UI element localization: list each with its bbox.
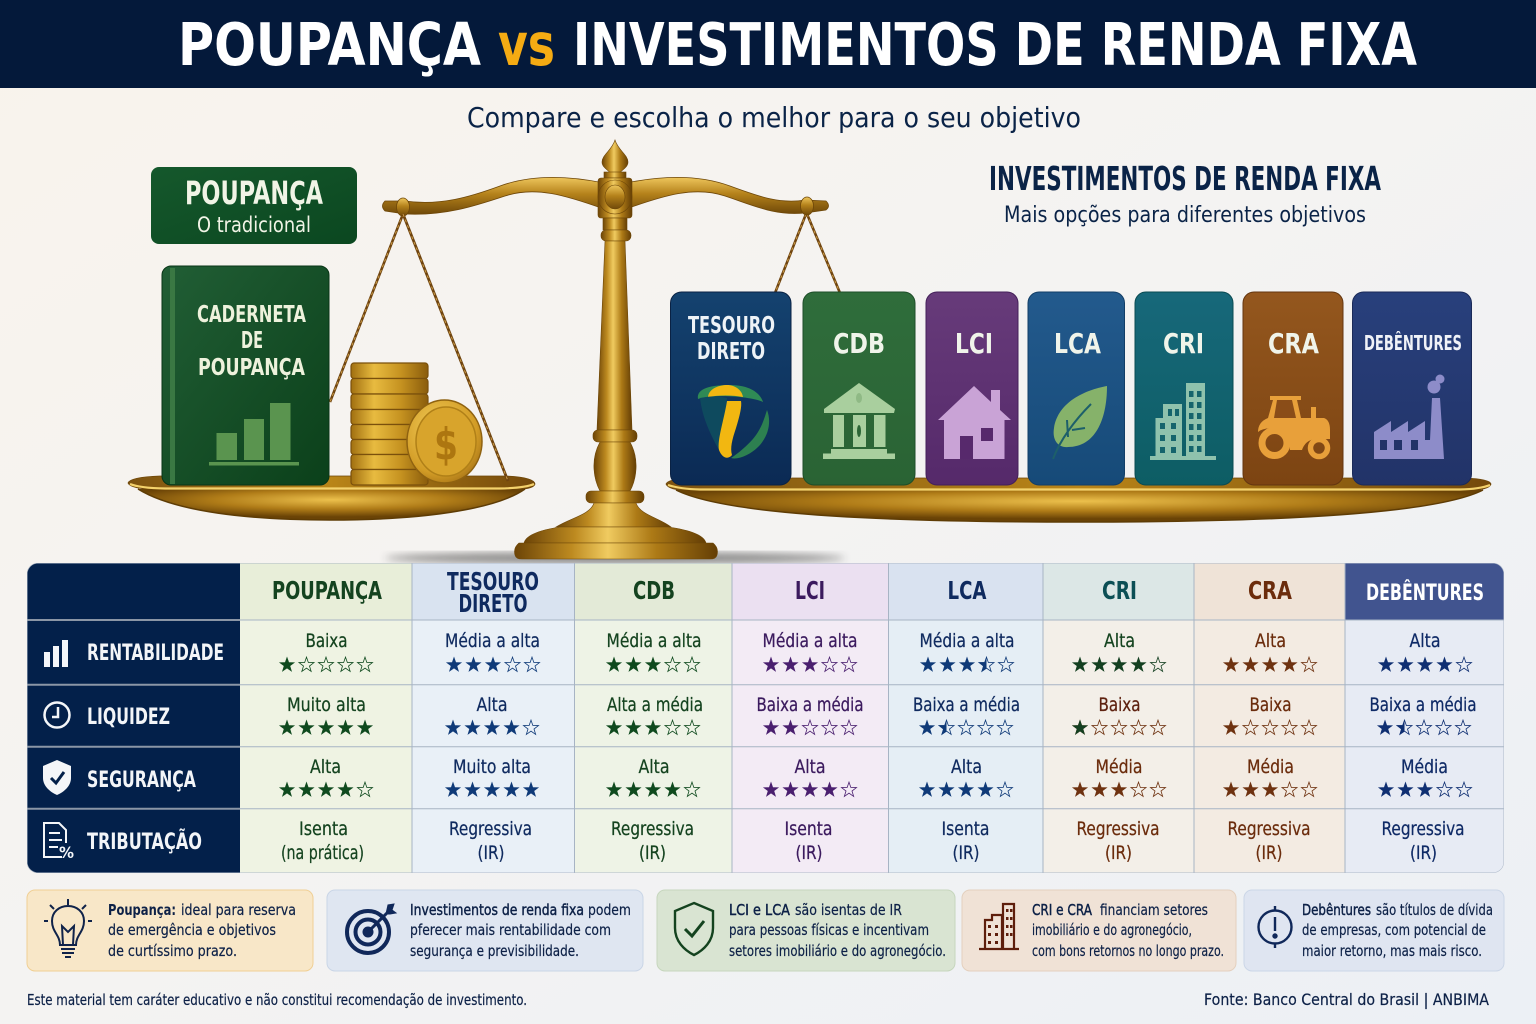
title banner [0, 0, 1536, 88]
table column: tesouro direto: TESOURO [447, 567, 539, 596]
icon: tractor [1258, 396, 1330, 456]
callout: investimentos de renda fixa: podem [588, 901, 631, 919]
icon: growth bars [209, 403, 299, 466]
card: tesouro direto: DIRETO [697, 339, 765, 365]
callout: CRI e CRA [962, 890, 1236, 971]
callout: LCI e LCA: são isentas de IR [795, 901, 902, 919]
book: caderneta de poupança: POUPANÇA [198, 355, 305, 381]
callout: poupança [27, 890, 313, 971]
shadow under scale [385, 552, 845, 564]
icon: dollar coin [407, 400, 482, 483]
table column: LCI: (IR) [796, 842, 822, 864]
table column: CRI: CRI [1102, 576, 1137, 605]
table column: LCA: Média a alta [920, 630, 1014, 652]
book: caderneta de poupança: DE [241, 328, 263, 354]
card: LCI: LCI [955, 327, 993, 360]
table column: LCI: Baixa a média [756, 694, 864, 716]
row label: rentabilidade [44, 640, 224, 667]
callout: investimentos de renda fixa: pferecer mais rentabilidade com [410, 921, 611, 939]
row label: liquidez: LIQUIDEZ [87, 705, 170, 730]
callout: LCI e LCA [657, 890, 955, 971]
card: CRI: CRI [1163, 327, 1204, 360]
card: CRA [1243, 292, 1343, 485]
callout: debêntures [1244, 890, 1504, 971]
card: CDB [803, 292, 915, 485]
table column: LCI: Alta [794, 756, 826, 778]
table column: CRI [1043, 563, 1194, 873]
panel: investimentos heading: Mais opções para diferentes objetivos [1004, 203, 1366, 228]
scale chains [330, 214, 840, 402]
table column: LCA: Baixa a média [913, 694, 1020, 716]
table column: debêntures: Baixa a média [1370, 694, 1476, 716]
card: CRA: CRA [1268, 327, 1319, 360]
panel: poupança heading badge [151, 167, 357, 244]
table column: debêntures: (IR) [1410, 842, 1437, 864]
table column: poupança: Muito alta [287, 694, 366, 716]
table column: debêntures [1345, 563, 1504, 873]
table column: poupança: (na prática) [281, 842, 364, 864]
table column: LCI [732, 563, 888, 873]
title banner: vs [498, 10, 555, 79]
card: tesouro direto [670, 292, 791, 485]
row label: segurança [43, 760, 196, 795]
icon: bank [823, 383, 895, 459]
table column: CDB: CDB [633, 576, 675, 605]
icon: leaf [1053, 386, 1107, 459]
icon: house [938, 386, 1011, 459]
icon: buildings [979, 904, 1019, 949]
scale column [514, 140, 718, 559]
table column: poupança: Alta [310, 756, 341, 778]
table column: CRI: Média [1096, 756, 1142, 778]
disclaimer: Este material tem caráter educativo e não constitui recomendação de investimento. [27, 991, 527, 1009]
row label: tributação: % [59, 843, 74, 862]
table row labels [27, 563, 240, 873]
callout: poupança: ideal para reserva [181, 901, 296, 919]
icon: dollar coin: $ [434, 419, 458, 470]
callout: CRI e CRA: com bons retornos no longo prazo. [1032, 942, 1224, 960]
title banner: POUPANÇA [178, 10, 481, 79]
callout: debêntures: maior retorno, mas mais risco. [1302, 942, 1482, 960]
table column: LCI: Isenta [784, 818, 832, 840]
table column: tesouro direto: Alta [476, 694, 508, 716]
comparison table [27, 563, 1504, 873]
table column: CRA: Alta [1255, 630, 1286, 652]
table column: CRI: (IR) [1105, 842, 1132, 864]
callout: LCI e LCA: setores imobiliário e do agronegócio. [729, 942, 946, 960]
row label: tributação [44, 823, 202, 862]
card: CRI [1135, 292, 1233, 485]
card: CDB: CDB [833, 327, 885, 360]
source: Fonte: Banco Central do Brasil | ANBIMA [1204, 990, 1489, 1009]
callout: debêntures: de empresas, com potencial de [1302, 921, 1486, 939]
panel: investimentos heading [989, 159, 1381, 228]
callout: LCI e LCA: LCI e LCA [729, 901, 791, 919]
table column: CRA: Regressiva [1228, 818, 1310, 840]
scale right pan [666, 478, 1491, 522]
callout: CRI e CRA: financiam setores [1100, 901, 1208, 919]
table column: CRI: Alta [1104, 630, 1135, 652]
callout: CRI e CRA: imobiliário e do agronegócio, [1032, 921, 1192, 939]
table column: debêntures: Média [1401, 756, 1448, 778]
icon: shield check [675, 903, 713, 955]
table column: CDB [574, 563, 732, 873]
panel: poupança heading badge: O tradicional [197, 213, 311, 237]
card: LCI [926, 292, 1018, 485]
callout: investimentos de renda fixa [327, 890, 643, 971]
icon: tesouro logo [698, 385, 769, 458]
table column: CDB: Média a alta [606, 630, 702, 652]
table column: poupança: Isenta [299, 818, 348, 840]
table column: LCI: LCI [795, 576, 825, 605]
table column: tesouro direto: Média a alta [445, 630, 540, 652]
subtitle: Compare e escolha o melhor para o seu objetivo [467, 101, 1081, 134]
callout: LCI e LCA: para pessoas físicas e incentivam [729, 921, 929, 939]
table column: poupança [240, 563, 412, 873]
table column: poupança: POUPANÇA [272, 576, 382, 605]
callout: investimentos de renda fixa: Investimentos de renda fixa [410, 901, 584, 919]
balance scale [128, 140, 1491, 559]
table column: debêntures: Alta [1410, 630, 1440, 652]
table column: LCA: Isenta [942, 818, 990, 840]
book: caderneta de poupança: CADERNETA [197, 302, 306, 328]
table column: CRI: Baixa [1098, 694, 1140, 716]
table column: tesouro direto: Muito alta [453, 756, 531, 778]
card: LCA: LCA [1054, 327, 1101, 360]
table column: CDB: Alta a média [607, 694, 703, 716]
table column: LCA: LCA [948, 576, 987, 605]
table column: LCI: Média a alta [762, 630, 858, 652]
icon: alert [1258, 906, 1292, 948]
scale left pan [128, 476, 535, 520]
icon: factory [1374, 374, 1444, 459]
table column: CRI: Regressiva [1076, 818, 1160, 840]
table column: debêntures: DEBÊNTURES [1366, 580, 1484, 606]
icon: coin stack [351, 214, 508, 485]
callout: debêntures: Debêntures [1302, 901, 1371, 919]
table column: LCA [888, 563, 1043, 873]
icon: light bulb [44, 899, 92, 957]
card: LCA [1028, 292, 1124, 485]
table column: CRA: Baixa [1250, 694, 1292, 716]
row label: rentabilidade: RENTABILIDADE [87, 641, 224, 666]
card: debêntures [1352, 292, 1472, 485]
callout: investimentos de renda fixa: segurança e previsibilidade. [410, 942, 579, 960]
scale chain front [403, 214, 508, 481]
table column: CDB: Alta [638, 756, 670, 778]
table column: CRA [1194, 563, 1345, 873]
table column: tesouro direto [412, 563, 574, 873]
table column: CRA: CRA [1248, 576, 1292, 605]
icon: buildings [1150, 383, 1216, 460]
table column: CRA: (IR) [1256, 842, 1282, 864]
callout: poupança: Poupança: [108, 901, 176, 919]
callout: debêntures: são títulos de dívida [1376, 901, 1493, 919]
callout: poupança: de curtíssimo prazo. [108, 942, 237, 960]
table column: CDB: (IR) [639, 842, 666, 864]
card: tesouro direto: TESOURO [688, 313, 775, 339]
table column: tesouro direto: DIRETO [458, 589, 528, 618]
row label: segurança: SEGURANÇA [87, 768, 196, 793]
table column: tesouro direto: (IR) [478, 842, 504, 864]
card: debêntures: DEBÊNTURES [1364, 331, 1462, 355]
table column: LCA: Alta [951, 756, 982, 778]
callout: CRI e CRA: CRI e CRA [1032, 901, 1093, 919]
row label: tributação: TRIBUTAÇÃO [87, 829, 202, 855]
scale beam [382, 177, 828, 216]
row label: liquidez [44, 702, 170, 730]
table column: LCA: (IR) [952, 842, 980, 864]
book: caderneta de poupança [162, 266, 329, 485]
panel: poupança heading badge: POUPANÇA [185, 174, 323, 212]
callout: poupança: de emergência e objetivos [108, 921, 276, 939]
icon: target [347, 904, 396, 953]
table column: debêntures: Regressiva [1382, 818, 1464, 840]
table column: CRA: Média [1247, 756, 1294, 778]
table column: poupança: Baixa [306, 630, 348, 652]
table column: tesouro direto: Regressiva [449, 818, 532, 840]
table column: CDB: Regressiva [611, 818, 694, 840]
